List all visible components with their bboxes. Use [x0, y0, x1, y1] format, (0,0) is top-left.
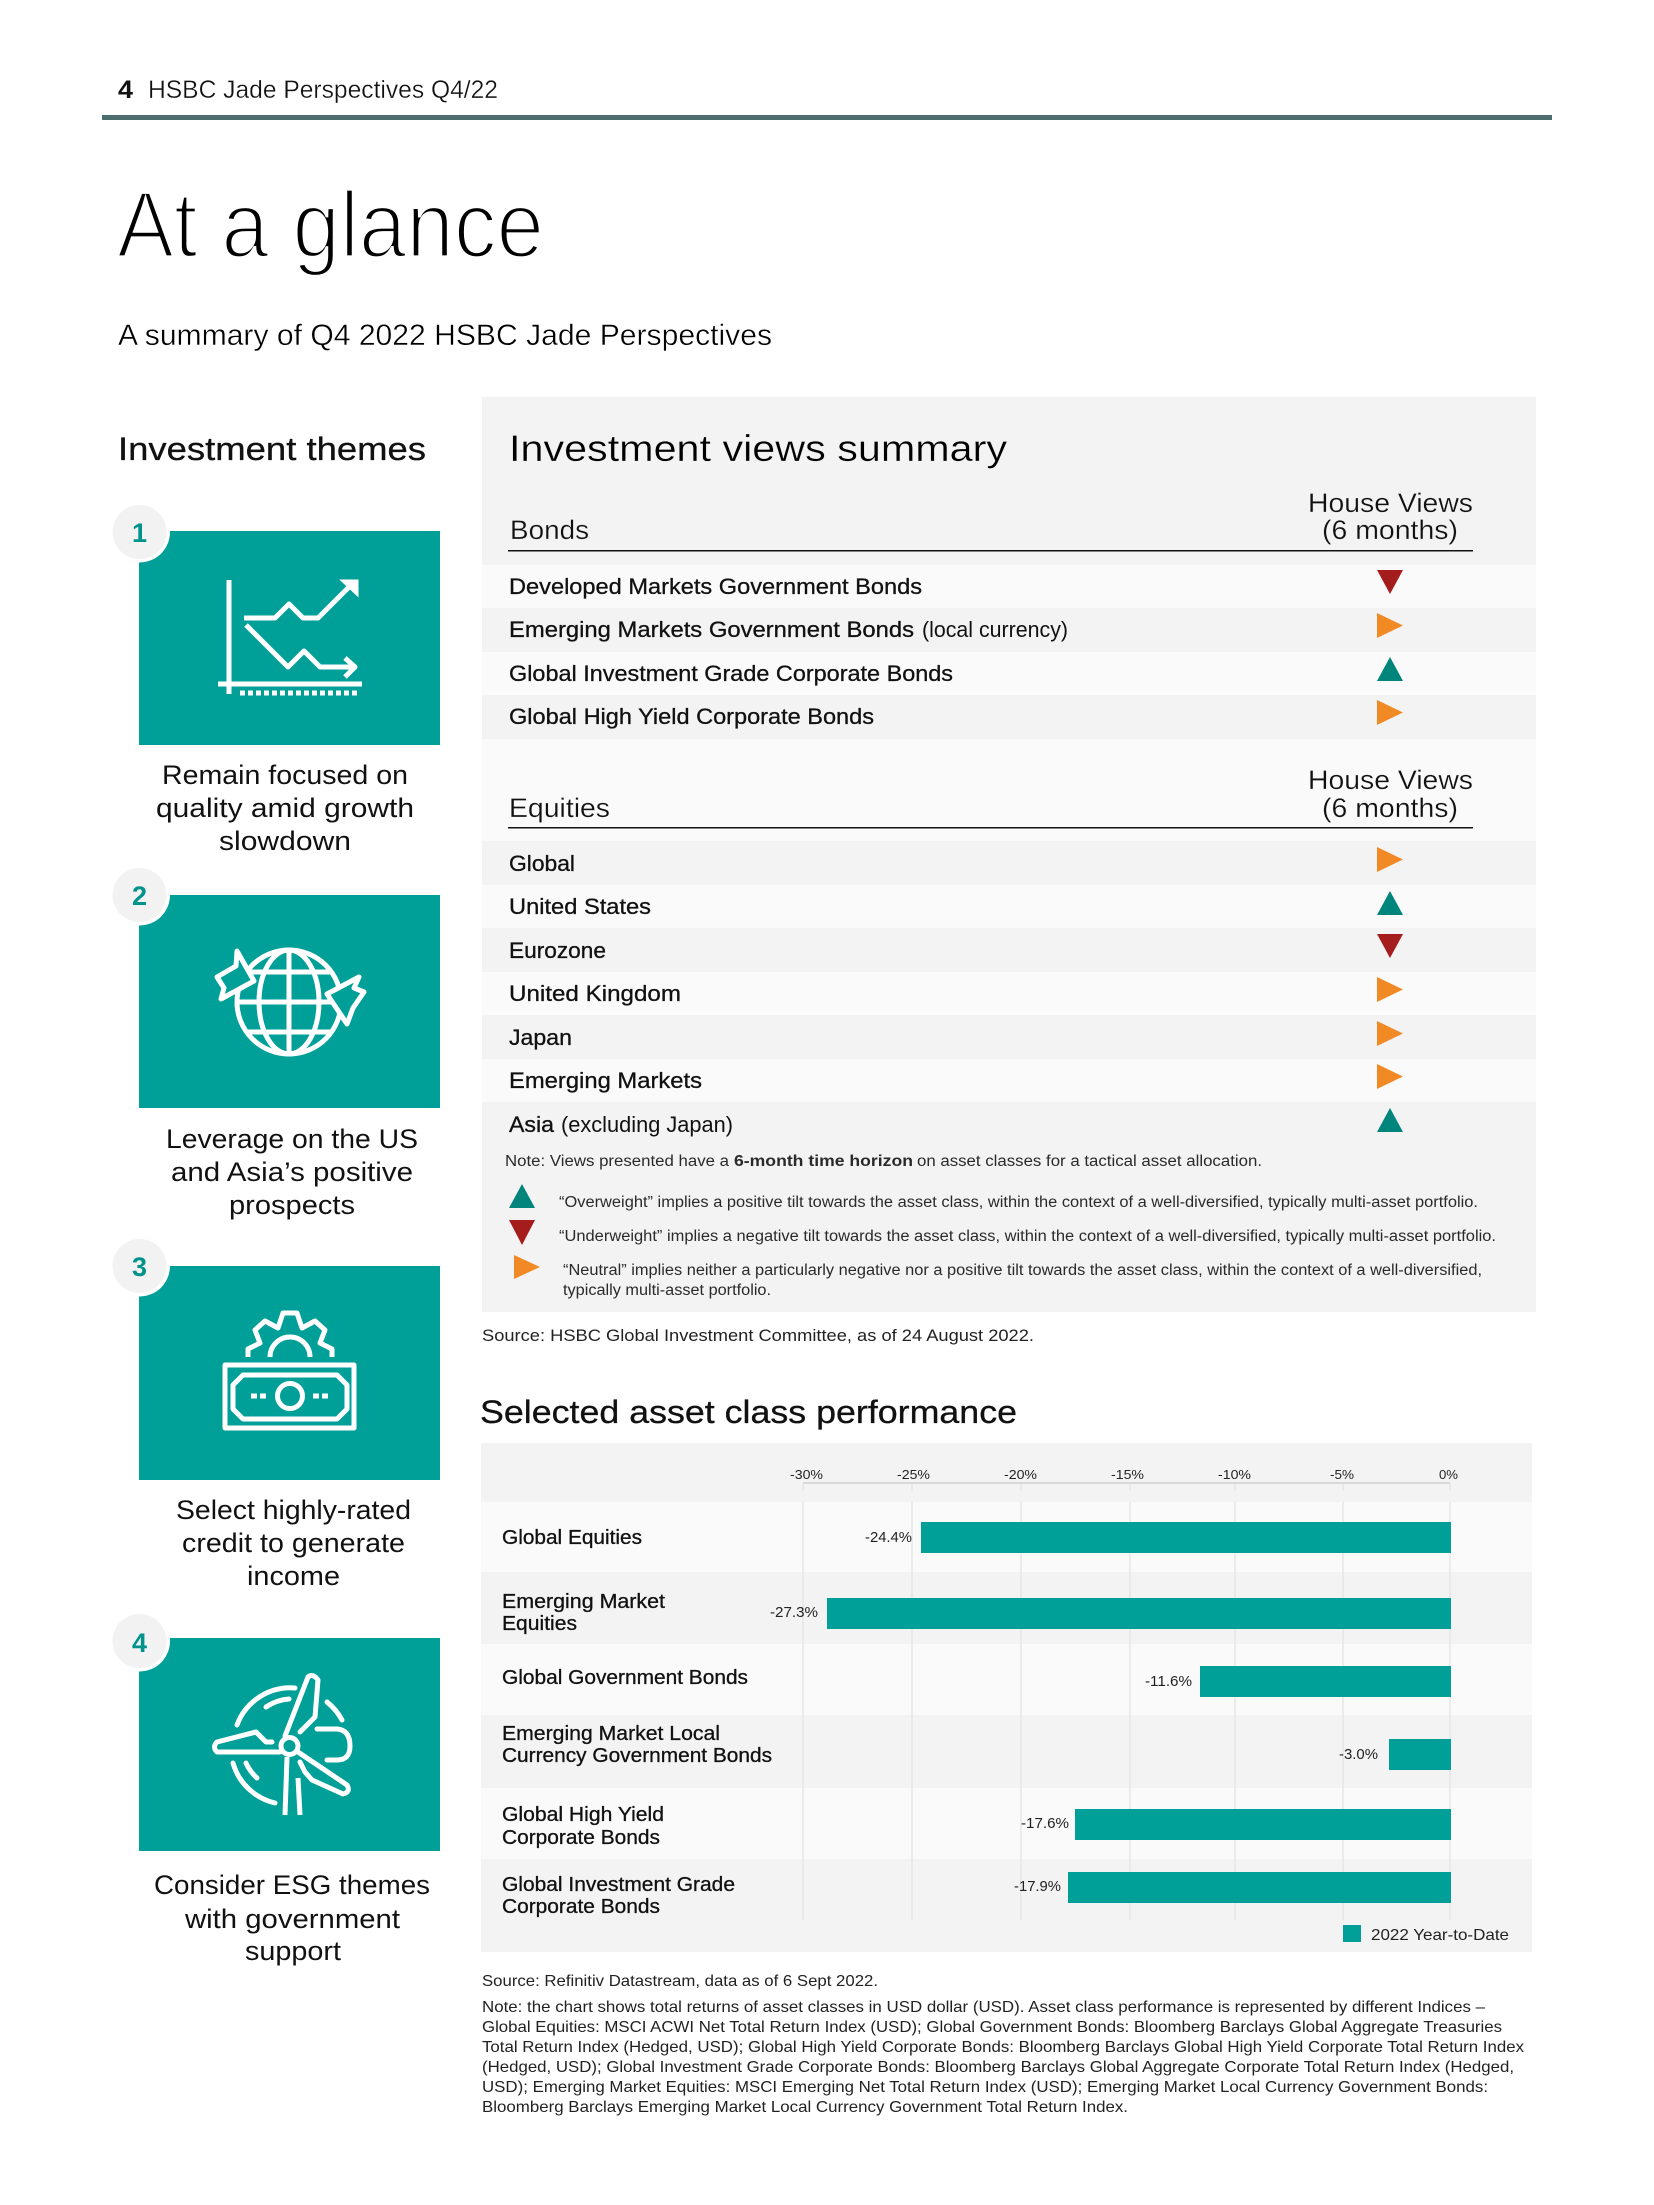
legend	[509, 1184, 1496, 1299]
footnote: Global Equities: MSCI ACWI Net Total Return Index (USD); Global Government Bonds: Bloomberg Barclays Global Aggregate Treasuries	[482, 2019, 1502, 2036]
bar: emerging market local currency government bonds: Currency Government Bonds	[502, 1745, 772, 1767]
bar: global investment grade corporate bonds: Global Investment Grade	[502, 1874, 735, 1896]
theme 1 caption	[156, 760, 414, 856]
axis	[481, 1467, 1532, 1920]
theme 4 caption: support	[245, 1936, 342, 1966]
bonds rows: Global Investment Grade Corporate Bonds	[509, 661, 953, 686]
theme 2 caption: Leverage on the US	[166, 1124, 418, 1154]
axis: -20%	[1004, 1467, 1037, 1482]
bar: global government bonds	[502, 1666, 1451, 1697]
bar: emerging market equities	[502, 1591, 1451, 1635]
footnote: Total Return Index (Hedged, USD); Global High Yield Corporate Bonds: Bloomberg Barclays Global High Yield Corporate Total Return Index	[482, 2039, 1524, 2056]
bar: global government bonds: -11.6%	[1145, 1673, 1192, 1690]
bonds rows	[509, 570, 1403, 729]
theme 3 caption	[176, 1495, 411, 1591]
note	[505, 1153, 1262, 1170]
theme 1 caption: Remain focused on	[162, 760, 408, 790]
note: Note: Views presented have a	[505, 1153, 729, 1170]
theme 3	[109, 1236, 440, 1591]
theme 4 tile	[139, 1638, 440, 1851]
bar: global government bonds: Global Government Bonds	[502, 1667, 748, 1689]
bonds rows: (local currency)	[922, 617, 1068, 642]
equities table header	[508, 765, 1473, 828]
theme 3 caption: income	[247, 1561, 340, 1591]
theme 4 caption	[154, 1870, 430, 1966]
title: At a glance	[117, 172, 544, 277]
theme 4 number	[112, 1614, 166, 1668]
legend: “Underweight” implies a negative tilt towards the asset class, within the context of a well-diversified, typically multi-asset portfolio.	[559, 1228, 1496, 1245]
bar: global high yield corporate bonds: Corporate Bonds	[502, 1827, 660, 1849]
bonds table header: Bonds	[510, 515, 589, 545]
theme 4 caption: with government	[184, 1904, 401, 1934]
axis: -10%	[1218, 1467, 1251, 1482]
bonds table header: House Views	[1308, 488, 1473, 518]
theme 1	[109, 502, 440, 856]
equities table header: (6 months)	[1322, 793, 1458, 823]
page header: HSBC Jade Perspectives Q4/22	[148, 76, 498, 104]
source: chart: Source: Refinitiv Datastream, data as of 6 Sept 2022.	[482, 1973, 878, 1990]
note: 6-month time horizon	[734, 1153, 913, 1170]
bar: emerging market local currency government bonds: -3.0%	[1339, 1746, 1378, 1763]
page header: 4	[118, 76, 133, 104]
equities rows: United Kingdom	[509, 981, 681, 1006]
icon: wind turbine	[214, 1676, 350, 1815]
legend: “Overweight” implies a positive tilt towards the asset class, within the context of a well-diversified, typically multi-asset portfolio.	[559, 1194, 1478, 1211]
bonds table header	[508, 488, 1473, 552]
bar: emerging market equities: Equities	[502, 1613, 577, 1635]
footnote: (Hedged, USD); Global Investment Grade Corporate Bonds: Bloomberg Barclays Global Aggregate Corporate Total Return Index (Hedged,	[482, 2059, 1514, 2076]
axis: -30%	[790, 1467, 823, 1482]
theme 3 caption: credit to generate	[182, 1528, 405, 1558]
footnote: Note: the chart shows total returns of asset classes in USD dollar (USD). Asset class performance is represented by different Indices –	[482, 1999, 1485, 2016]
icon: banknote and gear	[225, 1313, 354, 1428]
chart legend	[1343, 1925, 1509, 1944]
bar: global investment grade corporate bonds: -17.9%	[1014, 1878, 1061, 1895]
theme 1 number	[112, 505, 166, 559]
bar: emerging market local currency government bonds	[502, 1723, 1451, 1770]
theme 2 number	[112, 868, 166, 922]
theme 2	[109, 864, 440, 1220]
theme 2 tile	[139, 895, 440, 1108]
equities rows: Emerging Markets	[509, 1068, 702, 1093]
footnote	[482, 1999, 1524, 2116]
bar: global equities	[502, 1522, 1451, 1553]
axis: -25%	[897, 1467, 930, 1482]
theme 1 caption: slowdown	[219, 826, 351, 856]
legend: typically multi-asset portfolio.	[563, 1282, 771, 1299]
bonds rows: Developed Markets Government Bonds	[509, 574, 922, 599]
theme 3 number: 3	[132, 1252, 147, 1282]
panel: investment views summary	[482, 397, 1536, 1312]
theme 1 number: 1	[132, 518, 147, 548]
bar: emerging market equities: -27.3%	[770, 1604, 818, 1621]
equities rows: Japan	[509, 1025, 572, 1050]
footnote: USD); Emerging Market Equities: MSCI Emerging Net Total Return Index (USD); Emerging Market Local Currency Government Bonds:	[482, 2079, 1488, 2096]
equities rows: (excluding Japan)	[561, 1112, 733, 1137]
bonds table header: (6 months)	[1322, 515, 1458, 545]
theme 2 caption	[166, 1124, 418, 1220]
icon: line chart	[218, 580, 362, 694]
theme 1 tile	[139, 531, 440, 745]
bonds rows: Emerging Markets Government Bonds	[509, 617, 914, 642]
theme 1 caption: quality amid growth	[156, 793, 414, 823]
axis: -5%	[1330, 1467, 1354, 1482]
theme 3 number	[112, 1239, 166, 1293]
theme 4 caption: Consider ESG themes	[154, 1870, 430, 1900]
source: investment views: Source: HSBC Global Investment Committee, as of 24 August 2022.	[482, 1326, 1034, 1345]
equities table header: Equities	[509, 793, 610, 823]
bar: global investment grade corporate bonds: Corporate Bonds	[502, 1896, 660, 1918]
theme 2 number: 2	[132, 881, 147, 911]
equities rows: Eurozone	[509, 938, 606, 963]
panel heading: Investment views summary	[509, 428, 1008, 469]
heading: investment themes: Investment themes	[118, 431, 426, 467]
bar: global investment grade corporate bonds	[502, 1872, 1451, 1918]
bonds rows: Global High Yield Corporate Bonds	[509, 704, 874, 729]
equities table header: House Views	[1308, 765, 1473, 795]
legend: “Neutral” implies neither a particularly negative nor a positive tilt towards the asset class, within the context of a well-diversified,	[563, 1262, 1482, 1279]
equities rows: Asia	[509, 1112, 555, 1137]
axis: -15%	[1111, 1467, 1144, 1482]
bar: global high yield corporate bonds	[502, 1804, 1451, 1849]
theme 3 caption: Select highly-rated	[176, 1495, 411, 1525]
theme 4 number: 4	[132, 1628, 147, 1658]
heading: selected asset class performance: Selected asset class performance	[480, 1394, 1017, 1430]
theme 4	[109, 1610, 440, 1966]
bar: global high yield corporate bonds: Global High Yield	[502, 1804, 664, 1826]
bar: emerging market local currency government bonds: Emerging Market Local	[502, 1723, 720, 1745]
bar: global equities: -24.4%	[865, 1529, 912, 1546]
icon: globe with arrows	[217, 950, 364, 1054]
chart panel: asset class performance	[481, 1443, 1532, 1952]
bar: emerging market equities: Emerging Market	[502, 1591, 665, 1613]
footnote: Bloomberg Barclays Emerging Market Local Currency Government Total Return Index.	[482, 2099, 1128, 2116]
theme 2 caption: and Asia’s positive	[171, 1157, 413, 1187]
bar: global high yield corporate bonds: -17.6%	[1021, 1815, 1069, 1832]
equities rows	[509, 847, 1403, 1137]
axis: 0%	[1439, 1467, 1458, 1482]
equities rows: Global	[509, 851, 575, 876]
bar: global equities: Global Equities	[502, 1527, 642, 1549]
subtitle: A summary of Q4 2022 HSBC Jade Perspectives	[118, 319, 772, 352]
theme 3 tile	[139, 1266, 440, 1480]
equities rows: United States	[509, 894, 651, 919]
chart legend: 2022 Year-to-Date	[1371, 1927, 1509, 1944]
theme 2 caption: prospects	[229, 1190, 355, 1220]
note: on asset classes for a tactical asset allocation.	[917, 1153, 1262, 1170]
